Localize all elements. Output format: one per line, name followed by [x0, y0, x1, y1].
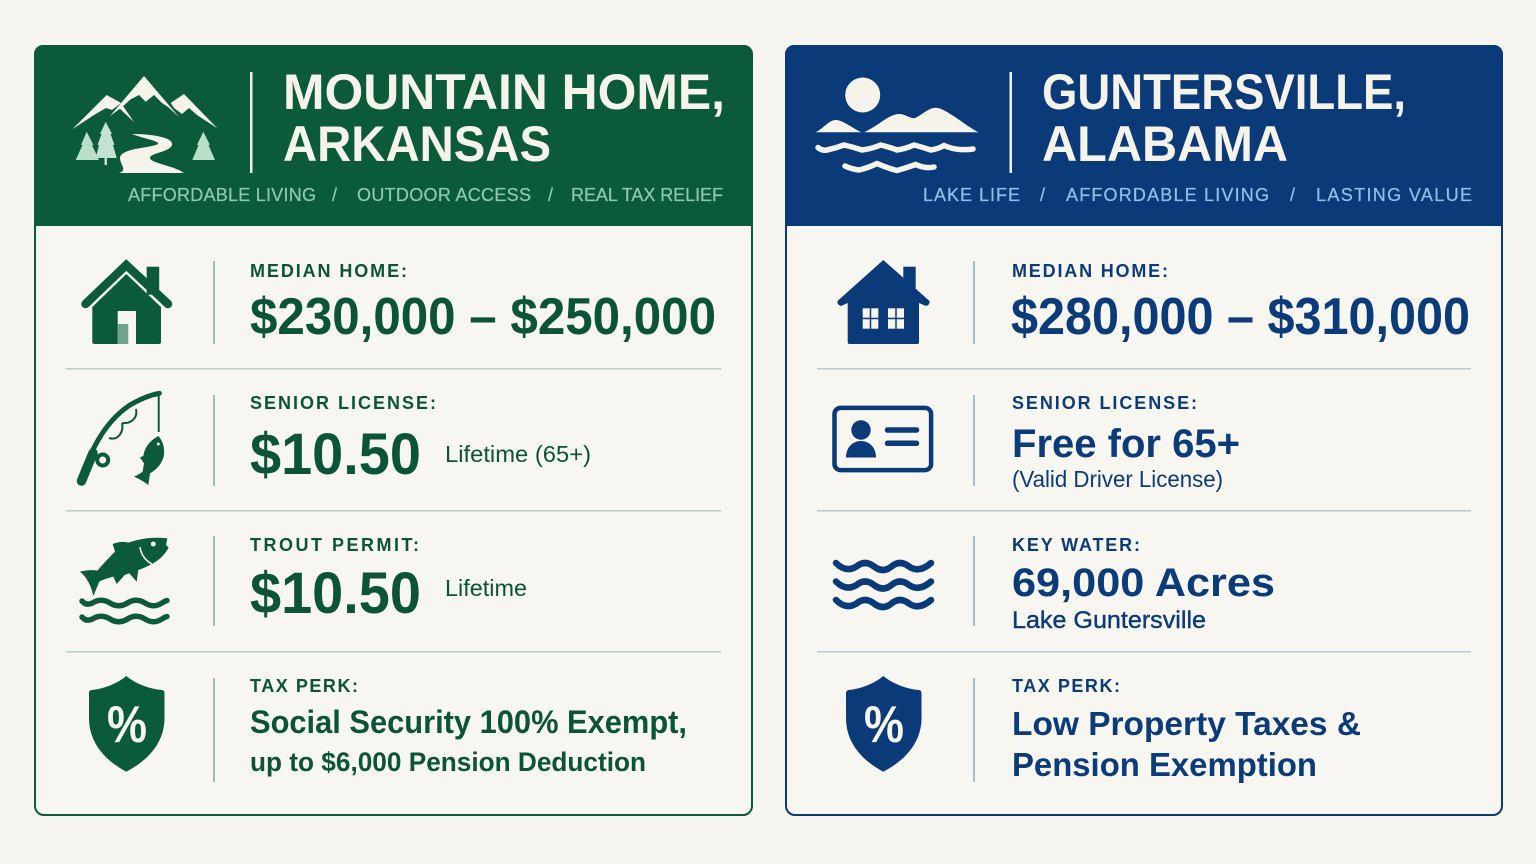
value: tax perk details: Social Security 100% Exempt, [250, 704, 687, 740]
value: home price range: $280,000 – $310,000 [1011, 288, 1470, 346]
icon: ID card [834, 408, 931, 470]
title: Guntersville, Alabama: ALABAMA [1042, 116, 1288, 172]
tagline: Guntersville [923, 185, 1472, 205]
header band: Mountain Home [34, 45, 753, 226]
tagline: Mountain Home: / [332, 185, 337, 205]
value: tax perk details: Pension Exemption [1012, 746, 1317, 783]
icon: percent shield: % [864, 696, 904, 754]
label: tax perk: TAX PERK: [250, 676, 358, 696]
label: median home: MEDIAN HOME: [1012, 261, 1168, 281]
panel: Mountain Home, Arkansas [34, 45, 753, 815]
icon: green house [86, 265, 168, 344]
row: trout permit, Arkansas [80, 535, 527, 626]
tagline: Mountain Home: REAL TAX RELIEF [571, 185, 723, 205]
icon: mountains, trees and river [72, 76, 217, 173]
row: median home, Arkansas [86, 261, 716, 346]
icon: percent shield: % [107, 696, 147, 754]
icon: sun, hills and lake [816, 78, 978, 170]
label: median home: MEDIAN HOME: [250, 261, 407, 281]
title: Mountain Home, Arkansas: ARKANSAS [283, 116, 551, 172]
note: lifetime 65+: Lifetime (65+) [445, 441, 591, 467]
label: trout permit: TROUT PERMIT: [250, 535, 419, 555]
tagline: Guntersville: LAKE LIFE [923, 185, 1020, 205]
tagline: Mountain Home: AFFORDABLE LIVING [128, 185, 316, 205]
title: Mountain Home, Arkansas: MOUNTAIN HOME, [283, 64, 725, 120]
panel: Guntersville, Alabama [785, 45, 1503, 815]
row: tax perk, Arkansas [89, 676, 687, 777]
tagline: Mountain Home [128, 185, 723, 205]
value: trout permit cost: $10.50 [250, 561, 421, 626]
value: tax perk details: up to $6,000 Pension Deduction [250, 747, 646, 777]
row: tax perk, Alabama [846, 676, 1361, 783]
icon: fishing rod and fish [82, 393, 164, 485]
title: Guntersville, Alabama [1042, 64, 1406, 172]
label: senior license: SENIOR LICENSE: [1012, 393, 1197, 413]
row: key water, Alabama [836, 535, 1275, 634]
row: senior license, Arkansas [82, 393, 591, 487]
icon: blue house [837, 260, 930, 344]
value: home price range: $230,000 – $250,000 [250, 288, 716, 346]
label: senior license: SENIOR LICENSE: [250, 393, 436, 413]
value: 69,000 acres: 69,000 Acres [1012, 561, 1275, 605]
tagline: Guntersville: AFFORDABLE LIVING [1066, 185, 1269, 205]
icon: jumping fish over waves [80, 538, 169, 622]
icon: percent shield [89, 676, 164, 772]
value: tax perk details [250, 704, 687, 777]
label: tax perk: TAX PERK: [1012, 676, 1120, 696]
note: Lake Guntersville: Lake Guntersville [1012, 607, 1206, 634]
tagline: Mountain Home: OUTDOOR ACCESS [357, 185, 531, 205]
title: Mountain Home, Arkansas [283, 64, 725, 172]
row: senior license, Alabama [834, 393, 1240, 492]
title: Guntersville, Alabama: GUNTERSVILLE, [1042, 64, 1406, 120]
row: median home, Alabama [837, 260, 1470, 346]
label: key water: KEY WATER: [1012, 535, 1140, 555]
note: valid driver license: (Valid Driver License) [1012, 466, 1223, 492]
tagline: Guntersville: LASTING VALUE [1316, 185, 1472, 205]
tagline: Mountain Home: / [548, 185, 553, 205]
value: free for 65+: Free for 65+ [1012, 422, 1240, 466]
icon: three waves [836, 563, 931, 607]
note: lifetime: Lifetime [445, 575, 527, 601]
icon: percent shield [846, 676, 922, 772]
value: tax perk details: Low Property Taxes & [1012, 705, 1361, 742]
value: senior license cost: $10.50 [250, 422, 421, 487]
header band: Guntersville [785, 45, 1503, 226]
value: tax perk details [1012, 705, 1361, 783]
tagline: Guntersville: / [1290, 185, 1295, 205]
tagline: Guntersville: / [1040, 185, 1045, 205]
